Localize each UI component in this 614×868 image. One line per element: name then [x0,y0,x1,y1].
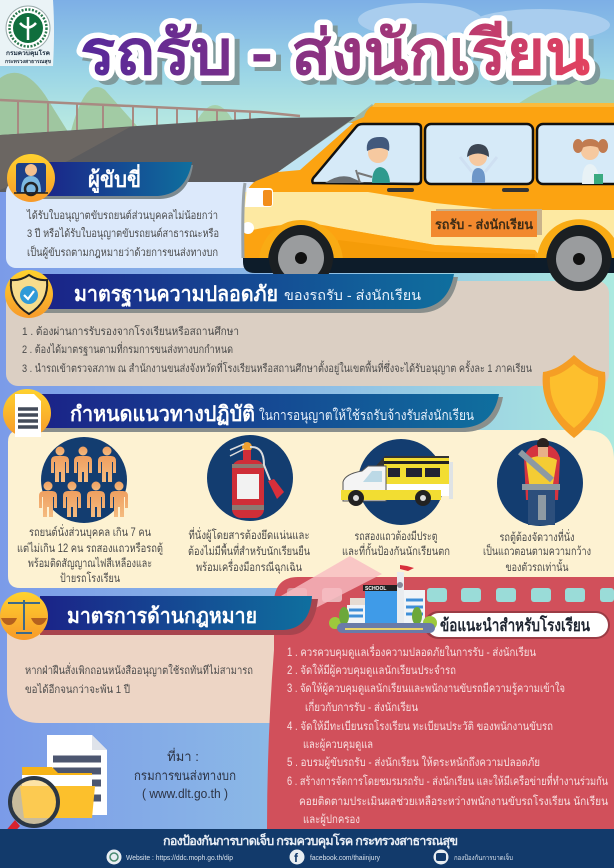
title: รถรับ - ส่งนักเรียน [86,24,596,93]
caption: songthaew [342,530,450,558]
logo: กระทรวงสาธารณสุข [5,59,52,65]
safety list [22,324,532,375]
title: รถรับ - ส่งนักเรียน [80,19,590,88]
facebook [290,850,380,865]
icon: seated person with belt [520,438,560,525]
driver text: เป็นผู้ขับรถตามกฎหมายว่าด้วยการขนส่งทางบก [27,245,218,259]
icon: group of people [39,446,128,517]
source text [134,748,236,801]
caption: extinguisher: พร้อมเครื่องมือกรณีฉุกเฉิน [196,559,302,574]
advice heading pill [424,611,610,639]
logo: กรมควบคุมโรค [6,49,50,57]
legal text: หากฝ่าฝืนสั่งเพิกถอนหนังสืออนุญาตใช้รถทันทีไม่สามารถ [25,662,253,677]
item: people [17,437,163,585]
caption: van seat: ของตัวรถเท่านั้น [506,559,569,574]
advice list: 5 . อบรมผู้ขับรถรับ - ส่งนักเรียน ให้ตระหนักถึงความปลอดภัย [287,756,540,769]
advice list: 2 . จัดให้มีผู้ควบคุมดูแลนักเรียนประจำรถ [287,664,456,677]
bus sign [431,209,542,237]
panel: school advice [267,577,614,829]
wheel arches [259,219,614,262]
driver text [26,209,219,259]
caption: people: พร้อมติดสัญญาณไฟสีเหลืองและ [28,557,152,570]
legal heading: มาตรการด้านกฎหมาย [67,604,257,628]
icon: scales [0,592,48,640]
legal text [25,662,253,696]
advice list: และผู้ปกครอง [303,813,360,826]
bus [242,103,614,273]
advice list: และผู้ควบคุมดูแล [303,738,373,751]
item: songthaew [341,439,453,558]
logo [0,0,54,66]
facebook: f [294,851,299,865]
caption: extinguisher: ต้องไม่มีพื้นที่สำหรับนักเรียนยืน [188,543,310,558]
guidelines heading: ในการอนุญาตให้ใช้รถรับจ้างรับส่งนักเรียน [259,407,474,424]
youtube [434,850,513,864]
caption: extinguisher: ที่นั่งผู้โดยสารต้องยึดแน่นและ [188,527,310,542]
icon: yellow truck [341,456,453,506]
panel: driver [6,182,262,268]
bus-window strip [287,588,614,602]
cream stripe [244,192,614,262]
legal heading [0,592,318,640]
front lamps [242,183,273,258]
student girl [573,139,608,184]
source text: ที่มา : [167,748,199,764]
icon: shield [5,270,53,318]
source text: กรมการขนส่งทางบก [134,768,236,783]
panel: safety standards [6,281,609,386]
driver text: 3 ปี หรือได้รับใบอนุญาตขับรถยนต์สาธารณะหรือ [27,227,219,240]
caption: van seat: รถตู้ต้องจัดวางที่นั่ง [500,529,574,544]
source text: ( www.dlt.go.th ) [142,786,228,801]
caption: songthaew: และที่กั้นป้องกันนักเรียนตก [342,543,450,558]
driver figure [325,137,390,183]
safety heading: มาตรฐานความปลอดภัย [74,283,278,308]
safety list: 2 . ต้องได้มาตรฐานตามที่กรมการขนส่งทางบกกำหนด [22,341,233,356]
advice list: 1 . ควรควบคุมดูแลเรื่องความปลอดภัยในการรับ - ส่งนักเรียน [287,644,536,659]
icon: extinguisher [230,442,284,518]
panel: guidelines [8,430,614,588]
legal text: ขอได้อีกจนกว่าจะพ้น 1 ปี [25,683,130,696]
title: รถรับ - ส่งนักเรียน [80,19,590,88]
facebook: facebook.com/thaiinjury [310,855,380,862]
advice list: เกี่ยวกับการรับ - ส่งนักเรียน [305,699,418,714]
caption: people: รถยนต์นั่งส่วนบุคคล เกิน 7 คน [29,524,151,539]
safety heading: ของรถรับ - ส่งนักเรียน [284,287,421,303]
item: fire extinguisher [188,435,310,574]
caption: van seat [483,529,591,574]
guidelines heading [3,389,503,437]
footer: กองป้องกันการบาดเจ็บ กรมควบคุมโรค กระทรวงสาธารณสุข [163,833,458,849]
icon: documents and magnifier [0,735,107,845]
safety list: 1 . ต้องผ่านการรับรองจากโรงเรียนหรือสถานศึกษา [22,324,239,338]
item: van seat [483,438,591,574]
advice list [287,644,608,826]
caption: people: แต่ไม่เกิน 12 คน รถสองแถวหรือรถตู้ [17,542,163,555]
driver heading [7,154,193,202]
icon: document [3,389,51,437]
driver text: ได้รับใบอนุญาตขับรถยนต์ส่วนบุคคลไม่น้อยกว่า [26,209,218,222]
school illustration: SCHOOL [365,586,386,592]
school illustration [329,565,437,633]
guidelines heading: กำหนดแนวทางปฏิบัติ [70,403,255,426]
wheels [269,226,611,291]
caption: extinguisher [188,527,310,574]
driver heading: ผู้ขับขี่ [88,163,141,194]
website: Website : https://ddc.moph.go.th/dip [126,855,233,862]
safety heading [5,270,458,318]
student boy [460,144,497,183]
footer [0,829,614,868]
pink light beam [274,556,382,616]
bus windows [312,124,614,184]
website [106,850,233,864]
icon: driver [7,154,55,202]
icon: large shield [543,355,605,438]
panel: legal body [7,625,290,723]
advice list: 4 . จัดให้มีทะเบียนรถโรงเรียน ทะเบียนประวัติ ของพนักงานขับรถ [287,719,553,733]
caption: songthaew: รถสองแถวต้องมีประตู [354,530,438,543]
bus sign: รถรับ - ส่งนักเรียน [435,217,533,232]
caption: people [17,524,163,585]
caption: people: ป้ายรถโรงเรียน [60,571,120,585]
youtube: กองป้องกันการบาดเจ็บ [454,853,513,862]
